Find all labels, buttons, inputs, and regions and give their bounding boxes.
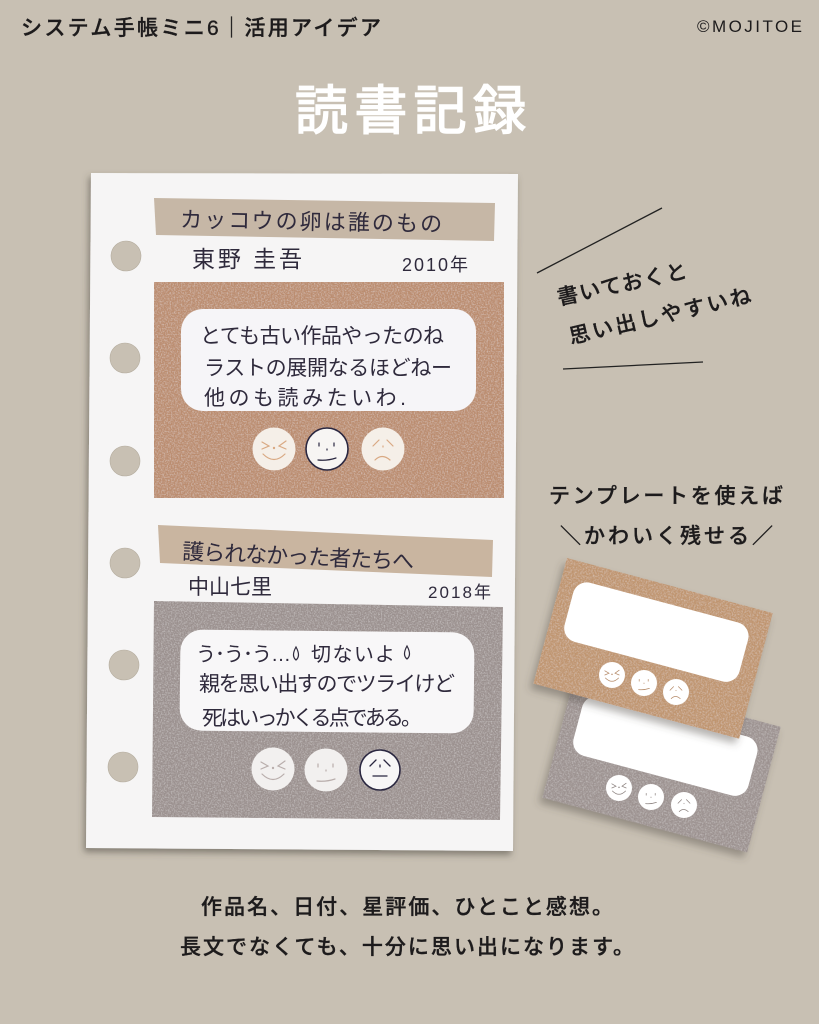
callout text	[555, 260, 753, 349]
main title: 読書記録	[295, 82, 526, 141]
grey card body	[542, 672, 781, 852]
panel: notebook page	[86, 173, 518, 851]
binder holes	[108, 241, 141, 782]
comment text: ラストの展開なるほどねー	[204, 357, 452, 380]
book title: 護られなかった者たちへ	[182, 539, 415, 574]
grey card white box	[570, 693, 761, 799]
brown card body	[533, 558, 773, 739]
header title: システム手帳ミニ6｜活用アイデア	[21, 16, 381, 40]
bottom caption: 作品名、日付、星評価、ひとこと感想。	[201, 895, 613, 919]
panel: first book record	[154, 198, 504, 498]
panel: second book record	[152, 525, 503, 820]
copyright credit: ©MOJITOE	[697, 17, 802, 36]
brown card faces	[599, 662, 689, 705]
comment text: 切ないよ	[311, 643, 395, 666]
comment box	[179, 629, 475, 734]
book title: カッコウの卵は誰のもの	[180, 207, 442, 237]
rating faces	[252, 428, 404, 470]
grey card	[152, 601, 503, 820]
brown card	[154, 282, 504, 498]
year: 2018年	[428, 583, 491, 602]
year: 2010年	[402, 255, 468, 275]
brown card white box	[561, 579, 752, 685]
template caption: テンプレートを使えば	[549, 485, 783, 508]
comment text: とても古い作品やったのね	[200, 325, 444, 348]
callout bottom line	[563, 362, 703, 369]
comment text: う･う･う…	[196, 644, 291, 666]
callout text: 思い出しやすいね	[567, 285, 753, 349]
template caption: ＼かわいく残せる／	[560, 525, 773, 548]
comment text	[200, 325, 452, 410]
comment text: 他のも読みたいわ.	[204, 387, 406, 410]
author: 東野 圭吾	[192, 246, 302, 272]
callout top line	[537, 208, 662, 273]
paper sheet	[86, 173, 518, 851]
title tape	[158, 525, 493, 577]
comment text	[196, 643, 455, 730]
callout text: 書いておくと	[555, 260, 689, 310]
bottom caption	[180, 895, 634, 959]
comment box	[181, 309, 476, 411]
panel: brown blank template	[533, 558, 773, 739]
comment text: 死はいっかくる点である。	[202, 707, 422, 730]
bottom caption: 長文でなくても、十分に思い出になります。	[180, 936, 634, 959]
title tape	[154, 198, 495, 241]
author: 中山七里	[188, 576, 272, 599]
comment text: 親を思い出すのでツライけど	[199, 673, 455, 696]
callout: easy to remember	[537, 208, 753, 369]
template caption	[549, 485, 783, 548]
rating faces	[252, 748, 400, 792]
panel: grey blank template	[542, 672, 781, 852]
grey card faces	[606, 775, 697, 818]
